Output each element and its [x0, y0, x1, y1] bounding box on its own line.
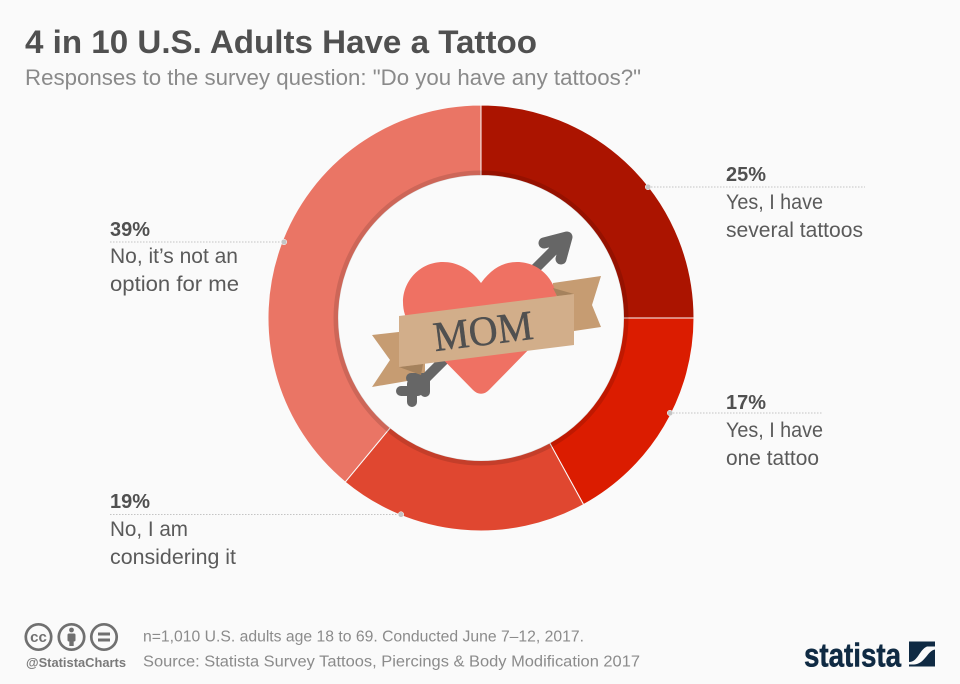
callout: 19% no considering: considering it	[110, 546, 236, 569]
source: Source: Statista Survey Tattoos, Piercings & Body Modification 2017	[143, 654, 640, 670]
icon: statista mark	[909, 642, 935, 666]
segment: yes, several tattoos 25%	[481, 105, 694, 318]
banner text: MOM	[431, 303, 536, 361]
ribbon right tail	[553, 276, 601, 331]
icon: cc: cc	[30, 629, 47, 646]
callout: 19% no considering: 19%	[110, 491, 150, 513]
handle: @StatistaCharts	[26, 656, 126, 670]
segment: yes, one tattoo 17%	[550, 318, 694, 505]
subtitle: Responses to the survey question: "Do you have any tattoos?"	[25, 65, 641, 90]
arrow head	[544, 237, 567, 259]
segment: no, considering 19%	[345, 428, 584, 531]
callout: 17% yes one: 17%	[726, 392, 766, 414]
callout: 25% yes several	[645, 164, 865, 242]
ribbon left tail	[372, 329, 425, 387]
segment: no, not an option 39%	[268, 105, 481, 482]
icon: no derivatives	[91, 624, 117, 650]
arrow fletching	[401, 378, 425, 402]
heart	[403, 262, 557, 394]
callout: 39% no option	[110, 219, 287, 296]
ribbon folds	[399, 288, 574, 375]
callout: 39% no option: option for me	[110, 273, 239, 296]
callout: 19% no considering	[110, 491, 404, 569]
callout: 25% yes several: several tattoos	[726, 219, 863, 242]
callout: 25% yes several: Yes, I have	[726, 191, 823, 214]
title: 4 in 10 U.S. Adults Have a Tattoo	[25, 24, 537, 60]
icon: heart with arrow and MOM banner	[372, 237, 601, 402]
icon: creative commons licence	[26, 624, 117, 650]
statista logo: statista	[804, 636, 902, 674]
callout: 39% no option: 39%	[110, 219, 150, 241]
icon: attribution	[59, 624, 84, 650]
callout: 25% yes several: 25%	[726, 164, 766, 186]
survey note: n=1,010 U.S. adults age 18 to 69. Conducted June 7–12, 2017.	[143, 628, 584, 646]
callout: 17% yes one: one tattoo	[726, 447, 819, 470]
ribbon front	[399, 294, 574, 367]
arrow shaft	[412, 242, 562, 392]
donut chart	[268, 105, 694, 531]
callout: 39% no option: No, it’s not an	[110, 245, 238, 268]
callout: 17% yes one	[667, 392, 823, 470]
callout: 19% no considering: No, I am	[110, 518, 188, 541]
callout: 17% yes one: Yes, I have	[726, 419, 823, 442]
